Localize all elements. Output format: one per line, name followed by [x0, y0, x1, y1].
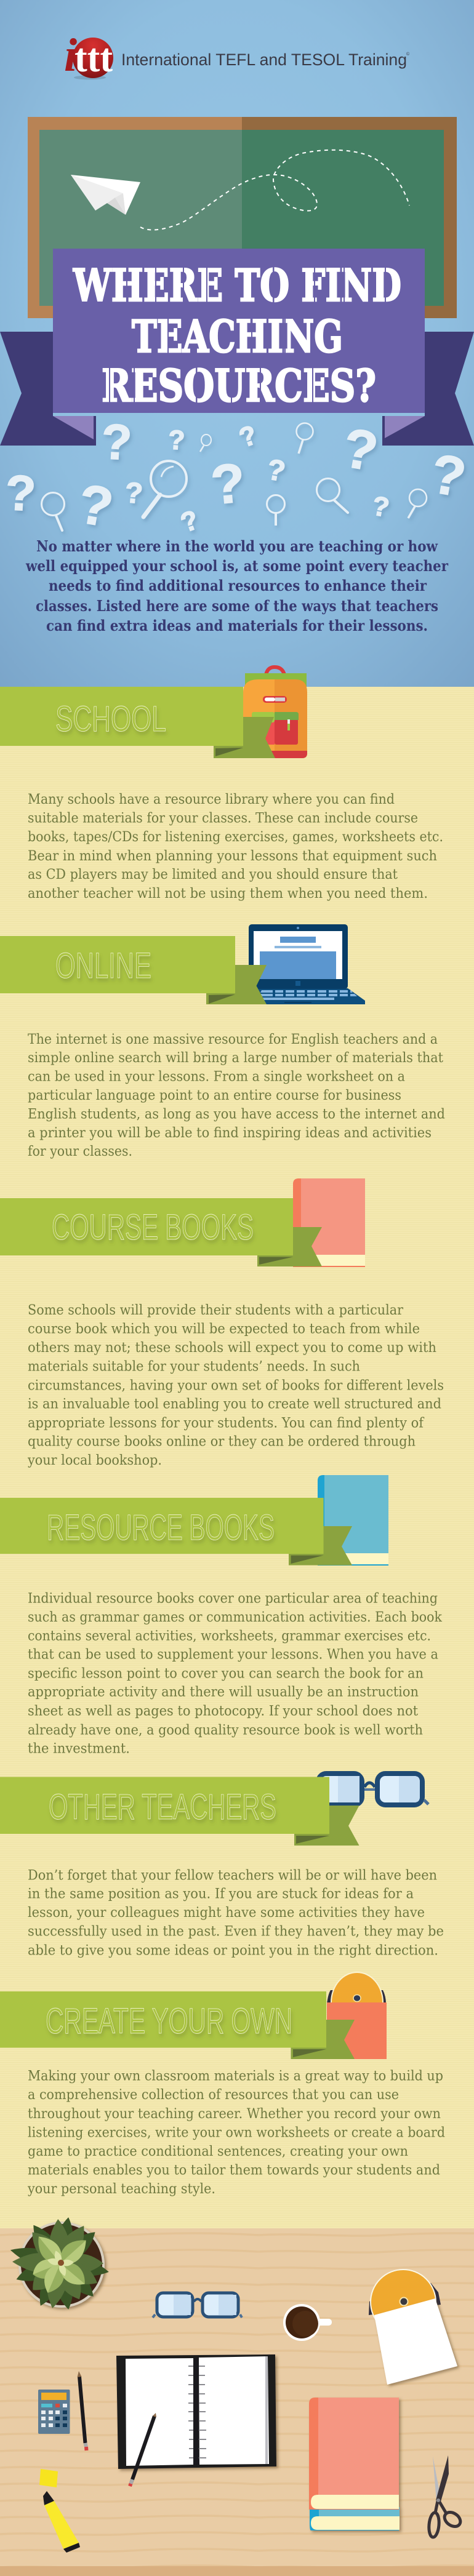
question marks and magnifiers: ? — [100, 414, 133, 471]
body text: English students, as long as you have access to the internet and — [28, 1106, 445, 1122]
question marks and magnifiers: ? — [265, 452, 288, 487]
body text: particular language point to an entire course for business — [28, 1088, 401, 1103]
intro text: can find extra ideas and materials for their lessons. — [46, 617, 428, 634]
question marks and magnifiers: ? — [426, 442, 470, 509]
body text: Individual resource books cover one particular area of teaching — [28, 1591, 438, 1606]
body text — [28, 792, 443, 902]
body text: successfully used in the past. Even if they haven’t, they may be — [28, 1924, 444, 1940]
intro text: needs to find additional resources to enhance their — [49, 577, 427, 594]
question marks and magnifiers: ? — [235, 420, 261, 454]
body text: contains several activities, worksheets, grammar exercises etc. — [28, 1628, 431, 1644]
body text: Don’t forget that your fellow teachers will be or will have been — [28, 1868, 437, 1883]
body text: Making your own classroom materials is a great way to build up — [28, 2069, 443, 2084]
body text: such as grammar games or communication activities. Each book — [28, 1610, 443, 1625]
heading: OTHER TEACHERS — [49, 1787, 276, 1827]
body text: your personal teaching style. — [27, 2182, 215, 2197]
body text: The internet is one massive resource for English teachers and a — [28, 1032, 438, 1047]
body text: in the same position as you. If you are stuck for ideas for a — [28, 1887, 414, 1902]
ITTT logo: © — [406, 52, 410, 57]
question marks and magnifiers: ? — [167, 425, 185, 456]
title — [73, 259, 401, 412]
icon: laptop — [249, 924, 365, 1004]
body text: that can be used to supplement your lessons. When you have a — [28, 1647, 438, 1663]
title: TEACHING — [132, 310, 343, 362]
ribbon — [0, 1198, 293, 1255]
ribbon — [0, 1498, 324, 1554]
ribbon — [0, 1777, 329, 1834]
question marks and magnifiers: ? — [338, 417, 382, 483]
icon: CD in sleeve — [327, 1972, 387, 2059]
coffee cup — [283, 2304, 332, 2341]
question marks and magnifiers: ? — [370, 490, 392, 523]
pencil — [78, 2371, 86, 2450]
body text: is an invaluable tool enabling you to create well structured and — [28, 1397, 441, 1412]
body text: Bear in mind when planning your lessons that equipment such — [28, 849, 437, 864]
ITTT logo: i — [64, 30, 77, 81]
body text: lesson, your colleagues might have some activities they have — [28, 1905, 425, 1921]
body text: appropriate activity and there will usually be an instruction — [28, 1685, 419, 1700]
ribbon tail — [294, 1806, 360, 1846]
question marks and magnifiers: ? — [124, 476, 144, 510]
ribbon fold — [259, 1257, 293, 1265]
body text: appropriate lessons for your students. You can find plenty of — [28, 1415, 425, 1431]
body text — [28, 1032, 445, 1159]
open notebook — [116, 2354, 276, 2469]
pencil on notebook — [130, 2413, 156, 2486]
body text: materials suitable for your students’ needs. In such — [28, 1359, 360, 1375]
ribbon fold — [296, 1836, 329, 1844]
ITTT logo: International TEFL and TESOL Training — [121, 50, 407, 69]
icon: backpack — [243, 667, 307, 758]
highlighter — [43, 2491, 80, 2553]
body text: course book which you will be expected to teach from while — [28, 1322, 420, 1337]
body text: the investment. — [28, 1742, 130, 1756]
body text: able to give you some ideas or point you in the right direction. — [28, 1943, 438, 1958]
icon: glasses — [318, 1774, 428, 1805]
sticky note — [39, 2469, 58, 2487]
heading: RESOURCE BOOKS — [47, 1508, 275, 1548]
body text: specific lesson point to cover you can search the book for an — [28, 1666, 424, 1681]
dashed flight path — [140, 150, 409, 230]
icon: red book — [293, 1178, 365, 1267]
ribbon fold — [293, 2049, 326, 2057]
body text: books, tapes/CDs for listening exercises, games, worksheets etc. — [28, 830, 443, 845]
body text: a printer you will be able to find inspiring ideas and activities — [28, 1126, 432, 1141]
paper plane — [71, 175, 140, 215]
body text: simple online search will bring a large number of materials that — [28, 1050, 443, 1066]
question marks and magnifiers — [4, 414, 470, 539]
panel: school — [0, 667, 443, 902]
icon: blue book — [318, 1475, 388, 1566]
body text — [28, 1591, 443, 1756]
body text: already have one, a good quality resource book is well worth — [28, 1723, 423, 1738]
heading: COURSE BOOKS — [52, 1207, 254, 1247]
heading: CREATE YOUR OWN — [46, 2001, 292, 2041]
body text: circumstances, having your own set of books for different levels — [28, 1378, 444, 1393]
title: RESOURCES? — [102, 359, 376, 412]
panel: course books — [0, 1178, 444, 1468]
body text: sheet as well as pages to photocopy. If your school does not — [28, 1703, 418, 1719]
ribbon fold — [209, 994, 235, 1004]
body text: can be used in your lessons. From a single worksheet on a — [28, 1070, 405, 1084]
question marks and magnifiers: ? — [177, 505, 203, 538]
body text: listening exercises, write your own worksheets or create a board — [28, 2126, 445, 2140]
question marks and magnifiers: ? — [209, 452, 247, 516]
ribbon — [0, 1991, 326, 2048]
ribbon fold — [215, 748, 243, 756]
ITTT logo — [64, 30, 410, 81]
body text — [27, 1303, 444, 1468]
ribbon tail — [289, 1526, 352, 1566]
panel: other teachers — [0, 1774, 444, 1958]
CD sleeve — [369, 2270, 457, 2385]
intro text — [25, 537, 449, 634]
panel: online — [0, 924, 445, 1159]
ribbon tail — [257, 1227, 322, 1266]
header background — [0, 0, 474, 687]
body text: Some schools will provide their students with a particular — [28, 1303, 403, 1318]
chalkboard — [28, 117, 457, 318]
ribbon tail — [214, 717, 275, 758]
ITTT logo: ttt — [74, 36, 113, 81]
cream page background — [0, 687, 474, 2228]
body text: others may not; these schools will expect you to come up with — [28, 1340, 436, 1356]
panel: create your own — [0, 1972, 445, 2197]
question marks and magnifiers: ? — [73, 473, 118, 539]
body text: Many schools have a resource library where you can find — [28, 792, 395, 807]
body text — [28, 1868, 444, 1958]
question marks and magnifiers: ? — [4, 465, 37, 522]
heading: ONLINE — [55, 946, 151, 986]
body text: as CD players may be limited and you should ensure that — [28, 867, 398, 882]
title ribbon — [0, 249, 474, 446]
desk — [0, 2228, 474, 2576]
body text: a comprehensive collection of resources that you can use — [28, 2087, 399, 2103]
body text — [27, 2069, 445, 2197]
scissors — [428, 2455, 463, 2538]
ribbon — [0, 936, 235, 993]
ribbon tail — [206, 965, 267, 1004]
body text: throughout your teaching career. Whether you record your own — [28, 2106, 441, 2122]
ribbon fold — [291, 1556, 324, 1564]
body text: another teacher will not be using them when you need them. — [28, 886, 428, 902]
ribbon — [0, 687, 243, 746]
calculator — [38, 2390, 70, 2434]
body text: game to practice conditional sentences, creating your own — [28, 2144, 408, 2159]
body text: suitable materials for your classes. These can include course — [28, 811, 418, 826]
desk glasses — [153, 2293, 242, 2318]
plant — [8, 2216, 110, 2311]
heading: SCHOOL — [55, 699, 166, 739]
ribbon tail — [291, 2020, 355, 2059]
body text: materials enables you to tailor them towards your students and — [28, 2162, 440, 2178]
body text: your local bookshop. — [27, 1453, 162, 1468]
body text: for your classes. — [28, 1144, 132, 1159]
book stack — [309, 2398, 400, 2530]
panel: resource books — [0, 1475, 443, 1756]
body text: quality course books online or they can be ordered through — [28, 1434, 416, 1450]
